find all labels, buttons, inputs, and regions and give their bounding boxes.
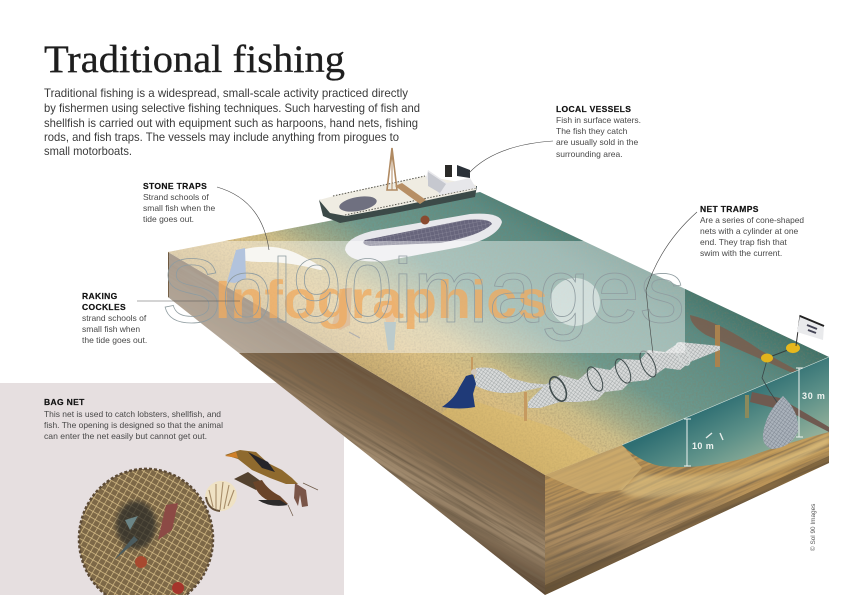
icon: hand net [474,367,552,393]
heading: bag net: BAG NET [44,397,85,407]
leader: raking cockles [137,300,240,302]
callout: net tramps: NET TRAMPS [700,204,759,214]
callout: raking cockles: RAKING [82,291,118,301]
intro text: shellfish is carried out with equipment such as harpoons, hand nets, fishing [44,117,418,130]
callout: net tramps: swim with the current. [700,248,782,258]
callout: raking cockles: the tide goes out. [82,335,147,345]
text: bag net description: This net is used to catch lobsters, shellfish, and [44,409,221,419]
icon: buoys and flag [761,315,824,362]
callout: local vessels: The fish they catch [556,126,628,136]
white glow behind g [550,278,600,326]
icon: fishing vessel [319,148,477,223]
text: bag net description: can enter the net easily but cannot get out. [44,431,207,441]
icon: standing and raking figures [227,248,398,350]
leader: net tramps [646,212,697,353]
dimension: 10 m: 10 m [692,441,714,451]
intro text: by fishermen using selective fishing techniques. Such harvesting of fish and [44,102,420,115]
callout: stone traps: STONE TRAPS [143,181,207,191]
left sediment face [168,252,545,595]
callout: stone traps: Strand schools of [143,192,209,202]
callout: raking cockles: strand schools of [82,313,147,323]
dimension: 30 m: 30 m [802,391,826,401]
right sediment face [545,432,829,595]
icon: round bag net with catch [79,469,213,595]
dimension: 10 m [684,419,714,466]
callout: net tramps [700,204,804,258]
callout: net tramps: nets with a cylinder at one [700,226,799,236]
callout: net tramps: Are a series of cone-shaped [700,215,804,225]
water cross-section [622,357,829,467]
leader: local vessels [469,141,553,173]
sea surface and sand [168,190,830,480]
intro text: small motorboats. [44,145,132,158]
dimension: 30 m [796,368,826,437]
callout: stone traps: small fish when the [143,203,216,213]
intro text: rods, and fish traps. The vessels may include anything from pirogues to [44,131,399,144]
callout: net tramps: end. They trap fish that [700,237,787,247]
callout: local vessels: are usually sold in the [556,137,638,147]
title: Traditional fishing [44,38,345,81]
callout: raking cockles [82,291,147,345]
icon: kneeling fisherman [442,369,477,408]
watermark: Infographics: Infographics [215,270,548,330]
icon: wooden stakes [471,325,720,421]
callout: raking cockles: COCKLES [82,302,126,312]
intro text: Traditional fishing is a widespread, small-scale activity practiced directly [44,87,408,100]
illustration: cutaway seabed block [168,148,830,595]
callout: local vessels [556,104,641,159]
callout: raking cockles: small fish when [82,324,140,334]
icon: shell [200,476,242,516]
icon: oval seine net [345,214,502,262]
rope and anchored bag [762,360,798,449]
panel: bag net [0,383,344,595]
callout: stone traps [143,181,216,224]
icon: small fish [706,433,723,440]
watermark band [169,241,685,353]
text: bag net description: fish. The opening is designed so that the animal [44,420,223,430]
callout: local vessels: Fish in surface waters. [556,115,641,125]
callout: local vessels: surrounding area. [556,149,623,159]
intro text [44,87,420,158]
icon: net tramp tube [528,341,720,408]
leader: stone traps [217,187,269,250]
callout: stone traps: tide goes out. [143,214,194,224]
callout: local vessels: LOCAL VESSELS [556,104,631,114]
icon: lobster [225,450,318,516]
stake in water [745,395,749,418]
copyright: © Sol 90 Images [809,504,817,551]
watermark: Sol90images: Sol90images [161,241,685,342]
text: bag net description [44,409,223,441]
